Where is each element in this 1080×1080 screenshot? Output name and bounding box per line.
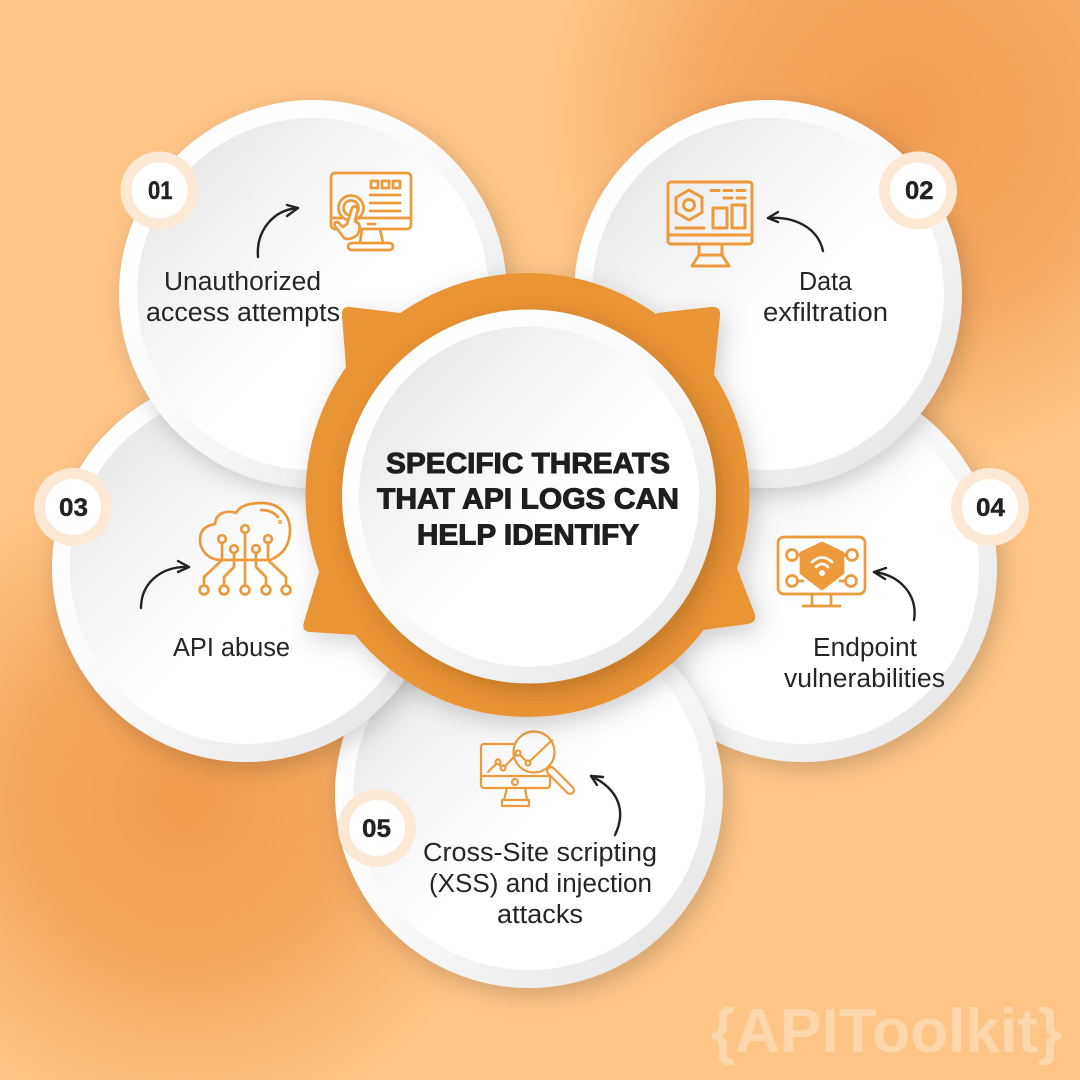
center disc: [342, 310, 716, 684]
circle 01: [119, 100, 507, 488]
panel: 01 unauthorized access: [119, 100, 507, 488]
label: data exfiltration: exfiltration: [763, 299, 888, 327]
icon: dashboard monitor: [668, 182, 752, 266]
panel: 03 API abuse: [34, 374, 440, 762]
circle 05: [335, 600, 723, 988]
label: API abuse: API abuse: [173, 634, 290, 662]
badge 02: 02: [905, 177, 934, 205]
title: THAT API LOGS CAN: [377, 484, 679, 516]
arrow: to cloud circuit: [141, 561, 189, 608]
panel: 02 data exfiltration: [574, 100, 962, 488]
label: cross-site scripting: (XSS) and injection: [429, 870, 652, 898]
badge 04: 04: [976, 494, 1005, 522]
title: HELP IDENTIFY: [417, 520, 639, 552]
badge 05: [338, 789, 416, 867]
arrow: to touch monitor: [258, 205, 298, 257]
panel: 05 cross-site scripting: [335, 600, 723, 988]
icon: monitor with magnifier: [481, 732, 570, 806]
label: unauthorized access attempts: Unauthorized: [164, 268, 321, 296]
title: SPECIFIC THREATS: [386, 448, 670, 480]
badge 03: 03: [59, 494, 88, 522]
panel: 04 endpoint vulnerabilities: [609, 374, 997, 762]
label: unauthorized access attempts: access attempts: [146, 299, 340, 327]
badge 01: [120, 152, 198, 230]
label: unauthorized access attempts: [146, 268, 340, 327]
arrow: to monitor with magnifier: [591, 776, 620, 835]
icon: monitor with shield and wifi: [778, 537, 865, 606]
label: cross-site scripting: Cross-Site scripting: [423, 839, 657, 867]
central hub: [303, 273, 755, 717]
label: endpoint vulnerabilities: [784, 634, 945, 693]
icon: touch monitor: [331, 173, 411, 250]
circle 02: [574, 100, 962, 488]
badge 04: [951, 468, 1029, 546]
label: endpoint vulnerabilities: Endpoint: [813, 634, 917, 662]
badge 05: 05: [362, 815, 391, 843]
arrow: to shield monitor: [874, 568, 915, 620]
badge 02: [879, 152, 957, 230]
badge 03: [34, 468, 112, 546]
content: 04 icon, arrow, label, badge: [778, 468, 1029, 693]
watermark: APIToolkit logo: {APIToolkit}: [711, 997, 1062, 1066]
label: data exfiltration: Data: [799, 268, 853, 296]
title: [377, 448, 679, 552]
label: cross-site scripting: attacks: [497, 901, 583, 929]
label: endpoint vulnerabilities: vulnerabilities: [784, 665, 945, 693]
circle 03: [52, 374, 440, 762]
orange spiked ring: [303, 273, 755, 717]
arrow: to dashboard monitor: [768, 212, 823, 251]
badge 01: 01: [148, 177, 173, 205]
label: data exfiltration: [763, 268, 888, 327]
icon: cloud circuit: [200, 503, 290, 594]
label: cross-site scripting: [423, 839, 657, 929]
circle 04: [609, 374, 997, 762]
